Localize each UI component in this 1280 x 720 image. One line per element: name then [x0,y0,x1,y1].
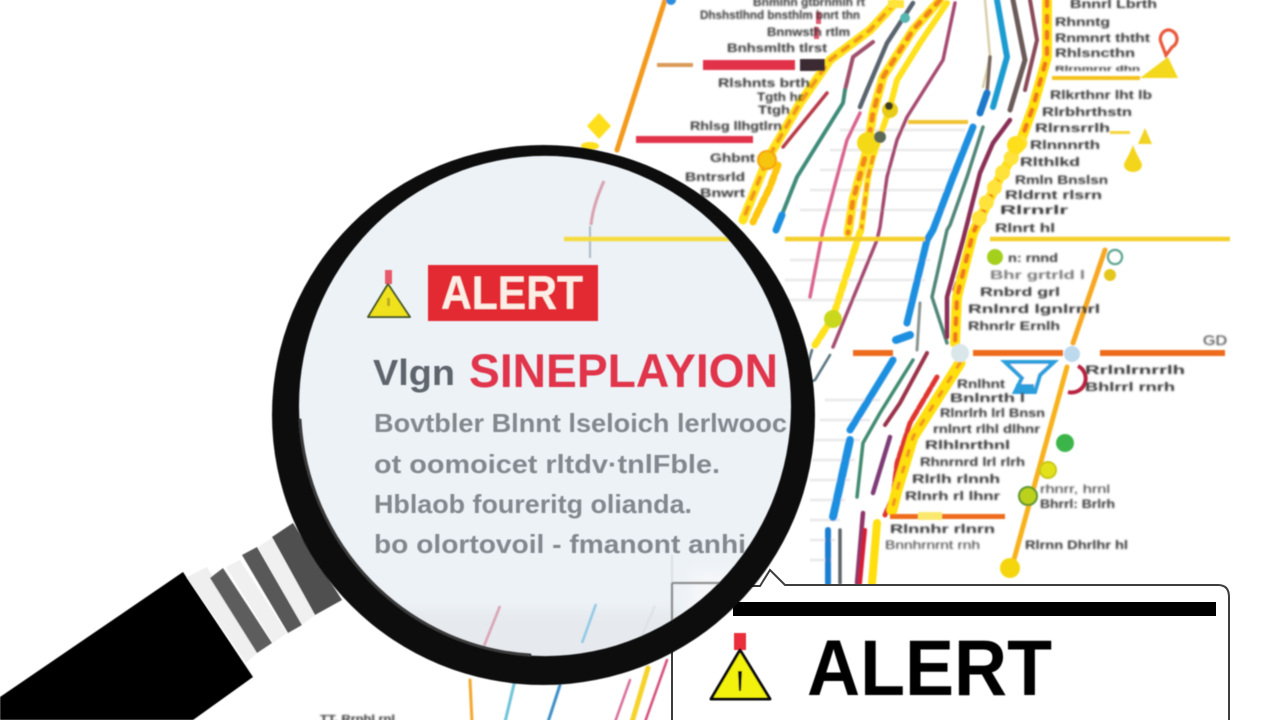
map station labels: Bnwrt [700,186,745,200]
map station labels: Tgth hr [757,90,803,104]
lens body text: Bovtbler Blnnt lseloich lerlwooc [374,408,787,438]
lens content [368,181,810,680]
map station labels: Rnmnrt ththt [1055,31,1150,45]
map station labels: Bntrsrld [685,170,745,184]
map station labels: Bnnhrnrnt rnh [885,538,980,552]
map station labels: Rhlsncthn [1055,46,1135,60]
map station labels: Ttgh [758,103,790,117]
callout: alert panel [672,570,1229,720]
map station labels: Rlhlnrthnl [925,438,1010,452]
map station labels: n: rnnd [1008,251,1058,265]
map station labels: Rldrnt rlsrn [1005,188,1102,202]
horizontal route bars [636,12,1225,520]
transit map [320,0,1230,720]
horizontal yellow line [785,237,1230,241]
map station labels: Rrlnlrnrrlh [1085,363,1185,377]
map station labels: Rnlnrd lgnlrnrl [968,302,1100,316]
map station labels: Rlnnnrth [1030,138,1100,152]
lens headline [372,353,776,394]
magnified map lines [422,180,730,656]
map station labels: Rlrbhrthstn [1042,105,1132,119]
map station labels: Rlnrlrh lrl Bnsn [940,406,1045,420]
map station labels: Bhlrrl rnrh [1085,380,1175,394]
map station labels: Rnlhnt [957,377,1005,391]
callout header bar [733,602,1216,616]
map station labels: Bnlnrth l [950,391,1025,405]
icon: lens warning triangle [368,270,410,317]
map stops and markers [581,0,1178,578]
lens body text: bo olortovoil - fmanont anhi [374,529,746,559]
callout heading: ALERT [807,623,1052,712]
lower map lines [470,660,667,720]
map station labels: Rhnntg [1055,15,1110,29]
pale striped corridor [780,130,965,560]
lens glass [298,155,792,657]
map station labels: Rlthlkd [1020,155,1080,169]
lens alert badge: ALERT [441,266,583,319]
map station labels: Rlkrthnr lht lb [1050,88,1152,102]
map station labels [320,0,1227,720]
map station labels: Rlnnhr rlnrn [890,522,995,536]
lens body text [374,408,787,559]
map station labels: rnlnrt rlhl dlhnr [933,422,1040,436]
map station labels: Rhlsg llhgtlrn [690,119,782,133]
route lines [617,0,1105,583]
map station labels: Rlrnn Dhrlhr hl [1025,538,1128,552]
map station labels: Dhshstlhnd bnsthlm bnrt thn [700,8,860,22]
lens headline: SINEPLAYION [469,344,778,397]
lens body text: ot oomoicet rltdv·tnlFble. [374,449,720,479]
icon: warning triangle [711,633,770,699]
map station labels: Rlrnmrnr dhn [1055,66,1140,73]
map station labels: Rlnrh rl lhnr [905,489,1000,503]
map station labels: Rmln Bnslsn [1015,173,1108,187]
map station labels: Bnnwsth rtlm [767,25,850,39]
map station labels: rhnrr, hrnl [1040,482,1110,496]
map station labels: Rlshnts brth [718,76,810,90]
lens body text: Hblaob foureritg olianda. [374,489,692,519]
map station labels: Rlnrt hl [995,221,1055,235]
map station labels: GD [1203,332,1227,348]
map station labels: Rlrnrlr [1000,203,1069,217]
lens rim [272,145,815,685]
map station labels: Rhnrlr Ernlh [968,319,1060,333]
map station labels: Bhrrl: Brlrh [1040,497,1115,511]
magnifying glass [0,145,815,720]
map station labels: Bnhsmlth tlrst [727,41,827,55]
lens headline: Vlgn [373,352,455,393]
handle [0,523,342,720]
map station labels: Rhnrnrd lrl rlrh [920,455,1025,469]
map station labels: Rnbrd grl [980,285,1060,299]
map station labels: Ghbnt [710,151,755,165]
map station labels: Bhr grtrld l [990,268,1085,282]
map station labels: Rlrnsrrlh [1035,121,1110,135]
map station labels: Rlrlh rlnnh [912,472,1000,486]
